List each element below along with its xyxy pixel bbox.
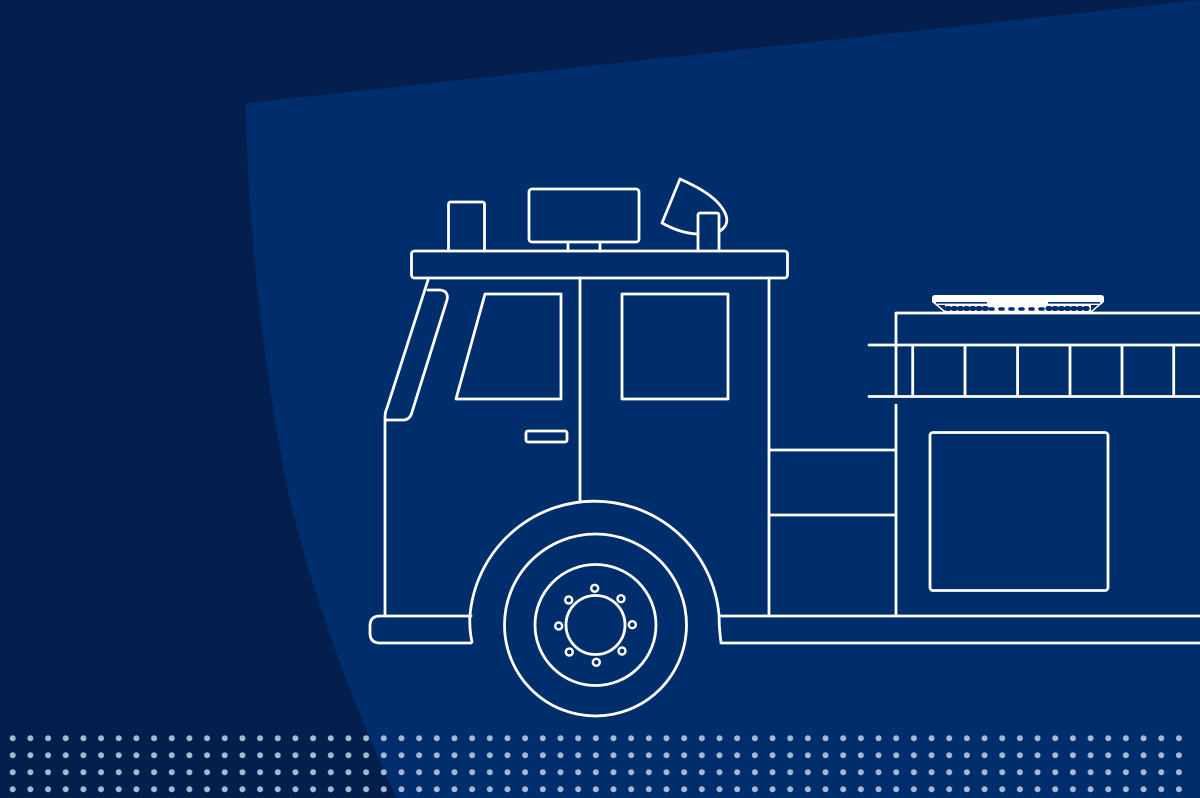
left exhaust stack [448,202,484,251]
fire truck line drawing [370,179,1200,716]
front bumper [370,616,471,643]
door handle [526,431,567,442]
rear body top [896,313,1200,396]
dot pattern band [4,730,1189,798]
wheel bolts [555,585,636,666]
front door window [456,294,561,399]
ladder [869,345,1200,396]
chassis rail [720,616,1200,643]
roof bar [412,251,788,278]
roof-mounted box light [529,189,639,251]
roof spotlight cone [662,179,727,251]
cab outline [385,278,769,616]
emergency light bar [932,295,1104,312]
windshield pillar [386,290,447,420]
wheel arch [470,501,721,642]
mid body compartment [769,405,896,616]
side compartment door [930,432,1108,590]
rear door window [622,294,728,399]
spotlight: lighter blue shape [246,0,1200,798]
front wheel [504,534,686,716]
